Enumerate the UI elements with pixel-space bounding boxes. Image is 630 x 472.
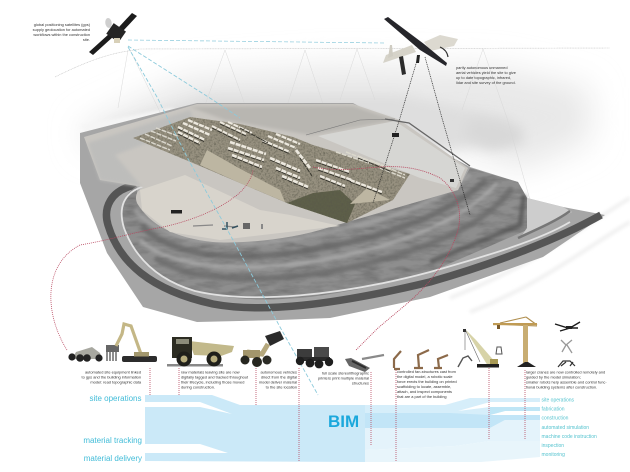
icon: GPS satellite: [89, 13, 137, 55]
drone caption: aerial vehicles yield the site to give: [456, 70, 516, 75]
icons: robot arms: [394, 350, 448, 369]
caption: robotic construction: force erects the building on printed: [397, 379, 457, 384]
caption: robotic construction: scaffolding to locate, assemble,: [397, 384, 451, 389]
caption: autonomous vehicles: direct from the digital: [261, 374, 297, 380]
caption: stereolithographic printers: [318, 370, 369, 386]
caption: automated site equipment: [82, 370, 142, 384]
icon: excavator: [106, 324, 157, 362]
platform outer apron: [80, 103, 605, 322]
drone survey sight lines: [373, 57, 470, 215]
caption: larger cranes: larger cranes are now controlled remotely and: [526, 370, 605, 374]
right sankey labels: fabrication: [542, 406, 565, 412]
icon: small excavator arm: [458, 356, 472, 367]
icon: wheel loader: [240, 331, 284, 367]
flat graded top surface: [84, 104, 468, 242]
caption: larger cranes: tional building systems after construction.: [526, 384, 597, 390]
right sankey labels: site operations: [542, 398, 575, 404]
satellite caption: workflows within the construction: [33, 32, 90, 37]
caption: larger cranes: [526, 370, 607, 390]
satellite caption: site.: [83, 37, 90, 42]
caption: raw materials: their lifecycle, including those moved: [181, 380, 244, 384]
white rim line: [122, 186, 570, 297]
left sankey labels: material tracking: [83, 436, 142, 445]
background haze landscape: [80, 66, 630, 312]
satellite caption: [33, 22, 91, 42]
caption: stereolithographic printers: full scale stereolithographic: [322, 370, 369, 376]
caption: robotic construction: that are a part of the building: [397, 394, 447, 399]
caption: automated site equipment: model: read topographic data: [90, 380, 142, 384]
drone caption: up to date topographic, infrared,: [456, 75, 511, 80]
drone caption: lidar and site survey of the ground.: [456, 80, 516, 85]
icon: crawler crane: [463, 329, 499, 368]
right-hand flat apron: [520, 198, 572, 238]
right sankey labels: monitoring: [542, 452, 565, 458]
satellite caption: supply geolocation for automated: [33, 27, 90, 32]
caption: automated site equipment: to gps and the building information: [82, 374, 141, 380]
icon: unmanned aerial drone: [383, 17, 458, 75]
caption: automated site equipment: automated site equipment linked: [85, 370, 141, 374]
graded surface shading: [88, 106, 470, 240]
sankey flow: right outputs: [365, 398, 540, 462]
icons: drone robots: [555, 322, 580, 367]
caption: robotic construction: controlled fan-structures cast from: [397, 369, 456, 374]
BIM label: BIM: [328, 412, 359, 431]
caption: raw materials: raw materials leaving site are now: [181, 370, 240, 374]
drone caption: [456, 65, 516, 85]
drone caption: partly autonomous unmanned: [456, 65, 507, 70]
icon: dump truck: [167, 337, 234, 366]
city model on the site: [133, 117, 410, 223]
left sankey labels: [83, 394, 142, 463]
caption: autonomous vehicles: to the site location: [266, 384, 297, 390]
right sankey labels: machine code instruction: [542, 434, 597, 440]
caption: larger cranes: smaller robots help assemble and control func-: [526, 380, 607, 384]
icon: tower crane: [493, 317, 537, 367]
icon: armoured print vehicle: [296, 347, 333, 368]
caption: autonomous vehicles: autonomous vehicles: [260, 370, 297, 374]
caption: robotic construction: the digital model, a robotic scale: [397, 374, 453, 379]
left sankey labels: material delivery: [84, 454, 142, 463]
icon: stereolithographic printer: [345, 355, 384, 372]
berm tonal bands: [135, 174, 524, 279]
small site machinery: [171, 133, 454, 229]
caption: raw materials: during construction.: [181, 384, 215, 390]
red dotted leader lines: [51, 167, 525, 462]
right sankey labels: construction: [542, 416, 569, 422]
icon: rover: [68, 347, 103, 362]
caption: raw materials: [181, 370, 249, 390]
satellite caption: global positioning satellites (gps): [34, 22, 91, 27]
sankey flow: left inputs and central block: [145, 395, 365, 462]
right sankey labels: inspection: [542, 443, 564, 449]
left sankey labels: site operations: [89, 394, 142, 403]
caption: raw materials: digitally tagged and tracked throughout: [181, 374, 249, 380]
caption: stereolithographic printers: structures: [352, 380, 369, 386]
blue GPS signal lines: [128, 40, 385, 395]
apron dark strip: [518, 211, 570, 238]
caption: autonomous vehicles: model deliver material: [259, 380, 297, 384]
terraced berm: [122, 168, 527, 299]
caption: larger cranes: guided by the model simulation;: [526, 374, 581, 380]
caption: autonomous vehicles: [259, 370, 297, 390]
right sankey labels: automated simulation: [542, 425, 589, 431]
caption: robotic construction: attach, and inspect components: [397, 389, 452, 394]
right sankey labels: [542, 398, 597, 458]
geolocation survey lines: [55, 48, 610, 200]
caption: robotic construction: [397, 369, 457, 399]
dark perimeter road: [106, 185, 601, 308]
caption: stereolithographic printers: printers print multiple material: [318, 376, 369, 380]
